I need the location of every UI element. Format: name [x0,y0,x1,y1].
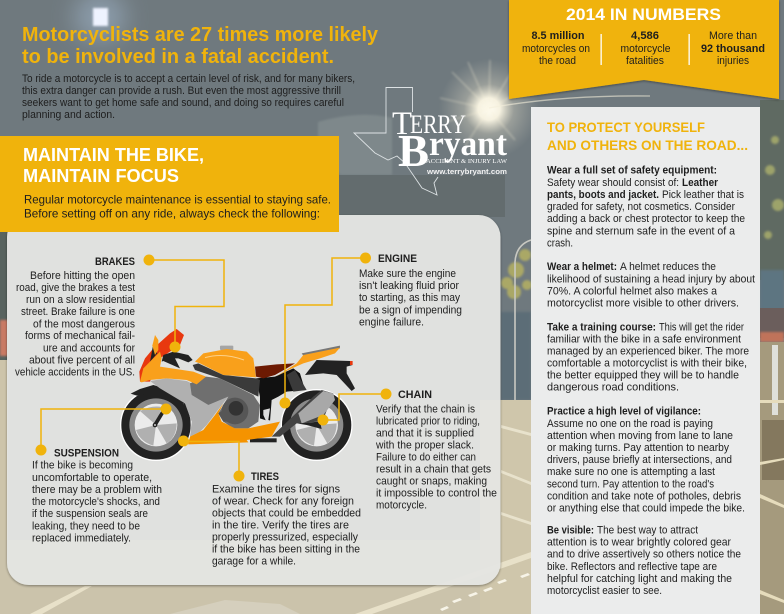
description: result in a chain that gets [376,464,491,476]
tip: training course: dangerous road conditions. [547,382,679,394]
description: garage for a while. [212,556,296,568]
callout: tires [178,436,361,568]
tip: training course: Take a training course: [547,322,656,334]
tip: vigilance: make sure no one is attempting a last [547,466,715,478]
description: motorcycle. [376,500,427,512]
label: TIRES [251,471,279,483]
tip: safety equipment: Safety wear should consist of: [547,177,679,189]
description: uncomfortable to operate, [32,472,152,484]
connector line [285,258,365,403]
description: ure and accounts for [43,342,135,354]
heading: MAINTAIN THE BIKE, [23,145,204,165]
stat: fatalities: 4,586 [631,30,659,42]
label: ENGINE [378,253,417,265]
tip: helmet: likelihood of sustaining a head injury by about [547,274,755,286]
description: and that it is supplied [376,428,474,440]
description: of the most dangerous [33,318,135,330]
tip: helmet: 70%. A colorful helmet also makes a [547,286,717,298]
description: properly pressurized, especially [212,532,359,544]
main heading: to be involved in a fatal accident. [22,45,334,68]
description: about five percent of all [29,354,135,366]
tip: safety equipment [547,164,745,250]
logo: Terry Bryant [354,88,507,195]
stat: injuries: More than [709,30,757,42]
front fairing [140,352,206,384]
description: isn't leaking fluid prior [359,280,459,292]
description: engine failure. [359,316,424,328]
logo wordmark [392,106,507,176]
markers [178,436,244,482]
callout: engine [280,252,462,408]
label: SUSPENSION [54,448,119,460]
description: lubricated prior to riding, [376,416,480,428]
tip: helmet [547,261,755,310]
panel: bike maintenance [7,215,500,585]
description: in the tire. Verify the tires are [212,520,349,532]
callout: brakes [15,254,224,378]
tip: safety equipment: crash. [547,238,573,250]
intro paragraph: seekers want to get home safe and sound, and doing so requires careful [22,97,344,109]
tip: safety equipment: Leather [682,177,718,189]
tip: vigilance: Assume no one on the road is paying [547,418,713,430]
fuel tank [195,349,256,377]
intro paragraph: To ride a motorcycle is to accept a certain level of risk, and for many bikers, [22,73,355,85]
tip: safety equipment: graded for safety, not cosmetics. Consider [547,201,735,213]
stat: motorcycles: 8.5 million [532,30,584,42]
tip: training course: the better equipped they will be to handle [547,370,739,382]
text block: Before setting off on any ride, always check the following: [24,206,320,220]
description: leaking, they need to be [32,520,140,532]
heading [547,119,748,153]
heading: 2014 IN NUMBERS [566,6,721,24]
description: to starting, as this may [359,292,461,304]
description [32,460,162,544]
tree and lamp between panels [501,240,532,408]
tip: be visible: and to drive assertively so others notice the [547,548,741,560]
description [375,404,497,512]
markers [280,252,371,408]
description: objects that could be embedded [212,508,361,520]
description: caught or snaps, making [376,476,487,488]
text block [24,192,331,220]
panel: maintain the bike heading [0,136,339,232]
belly fairing [188,403,280,444]
description: be a sign of impending [359,304,462,316]
logo wordmark: ACCIDENT & INJURY LAW [426,159,507,165]
sunburst light [439,59,650,159]
right edge trees and road [760,100,784,614]
description: if the bike has been sitting in the [212,544,360,556]
heading: AND OTHERS ON THE ROAD... [547,137,748,153]
tip: training course: comfortable a motorcyclist is with their bike, [547,358,747,370]
description: Before hitting the open [30,270,135,282]
tip: vigilance: second turn. Pay attention to the road's [547,478,714,490]
tip: vigilance [547,406,745,514]
tip: be visible: The best way to attract [597,524,698,536]
front wheel [121,390,191,460]
icon: Texas outline [354,88,438,195]
logo wordmark: ryant [429,124,507,163]
tip: be visible: attention is to wear brightly colored gear [547,536,731,548]
description: If the bike is becoming [32,460,133,472]
callout: chain [318,388,497,512]
description: run on a slow residential [26,294,135,306]
intro paragraph: planning and action. [22,109,115,121]
callout: suspension [32,404,172,544]
tip: helmet: Wear a helmet: [547,261,617,273]
markers [36,404,172,456]
tip: helmet: A helmet reduces the [620,261,716,273]
stat: fatalities: fatalities [626,55,664,67]
stat: motorcycles: the road [539,55,576,67]
tip: be visible: helpful for catching light and making the [547,573,732,585]
description [212,484,361,568]
tip: vigilance: Practice a high level of vigilance: [547,406,701,418]
motorcycle illustration [121,329,355,460]
panel: 2014 in numbers [509,0,779,99]
tip: vigilance: drivers, pause briefly at intersections, and [547,454,732,466]
logo wordmark: www.terrybryant.com [426,167,507,176]
markers [144,254,180,352]
tip: vigilance: attention when moving from lane to lane [547,430,733,442]
intro paragraph: this extra danger can provide a rush. But even the most aggressive thrill [22,85,341,97]
tip: safety equipment: pants, boots and jacket. [547,189,659,201]
description: Verify that the chain is [376,404,475,416]
tip: vigilance: or anything else that could impede the bike. [547,502,745,514]
markers [318,388,392,426]
heading: MAINTAIN FOCUS [23,166,179,186]
description: there may be a problem with [32,484,162,496]
logo wordmark: ERRY [410,110,466,139]
stat: injuries: 92 thousand [701,43,765,55]
tip: training course: familiar with the bike in a safe environment [547,334,741,346]
description: if the suspension seals are [32,508,148,520]
road [0,232,531,614]
tip: safety equipment: Pick leather that is [662,189,744,201]
tip: be visible [547,524,741,597]
description: with the proper slack. [375,440,474,452]
rear wheel [281,390,352,460]
logo wordmark: T [392,106,412,142]
text block: Regular motorcycle maintenance is essential to staying safe. [24,192,331,206]
description [359,268,462,328]
description: road, give the brakes a test [16,282,135,294]
stat: fatalities: motorcycle [620,43,671,55]
tip: be visible: motorcyclist easier to see. [547,585,662,597]
tip: be visible: Be visible: [547,524,594,536]
heading: TO PROTECT YOURSELF [547,119,705,135]
tip: training course: This will get the rider [659,322,744,334]
connector line [41,409,166,450]
description: of wear. Check for any foreign [212,496,354,508]
description: street. Brake failure is one [21,306,135,318]
stat: injuries [701,30,765,67]
tip: training course: managed by an experienced biker. The more [547,346,749,358]
description: Make sure the engine [359,268,456,280]
description: the motorcycle's shocks, and [32,496,160,508]
description: replaced immediately. [32,532,131,544]
tip: safety equipment: spine and sternum safe in the event of a [547,226,735,238]
description: Failure to do either can [376,452,476,464]
stat: motorcycles: motorcycles on [522,43,590,55]
tip: be visible: bike. Reflectors and reflective tape are [547,561,717,573]
label: BRAKES [95,256,135,268]
tip: vigilance: condition and take note of potholes, debris [547,490,741,502]
tip: vigilance: or making turns. Pay attention to nearby [547,442,730,454]
logo wordmark: B [398,125,429,176]
stat: injuries: injuries [717,55,749,67]
intro paragraph [22,73,355,121]
description: Examine the tires for signs [212,484,340,496]
description: it impossible to control the [376,488,497,500]
tip: training course [547,322,749,394]
main heading: Motorcyclists are 27 times more likely [22,23,379,46]
heading [23,145,204,186]
description [15,270,135,378]
tip: safety equipment: Wear a full set of safety equipment: [547,164,717,176]
main heading [22,23,379,68]
connector line [323,394,386,420]
connector line [183,442,239,476]
label: CHAIN [398,389,432,401]
connector line [149,260,224,347]
stat: motorcycles [522,30,590,67]
tip: safety equipment: adding a back or chest protector to keep the [547,213,745,225]
stat: fatalities [620,30,671,67]
panel: to protect yourself [531,107,760,614]
description: forms of mechanical fail- [25,330,135,342]
tip: helmet: motorcyclist more visible to other drivers. [547,298,739,310]
description: vehicle accidents in the US. [15,366,135,378]
